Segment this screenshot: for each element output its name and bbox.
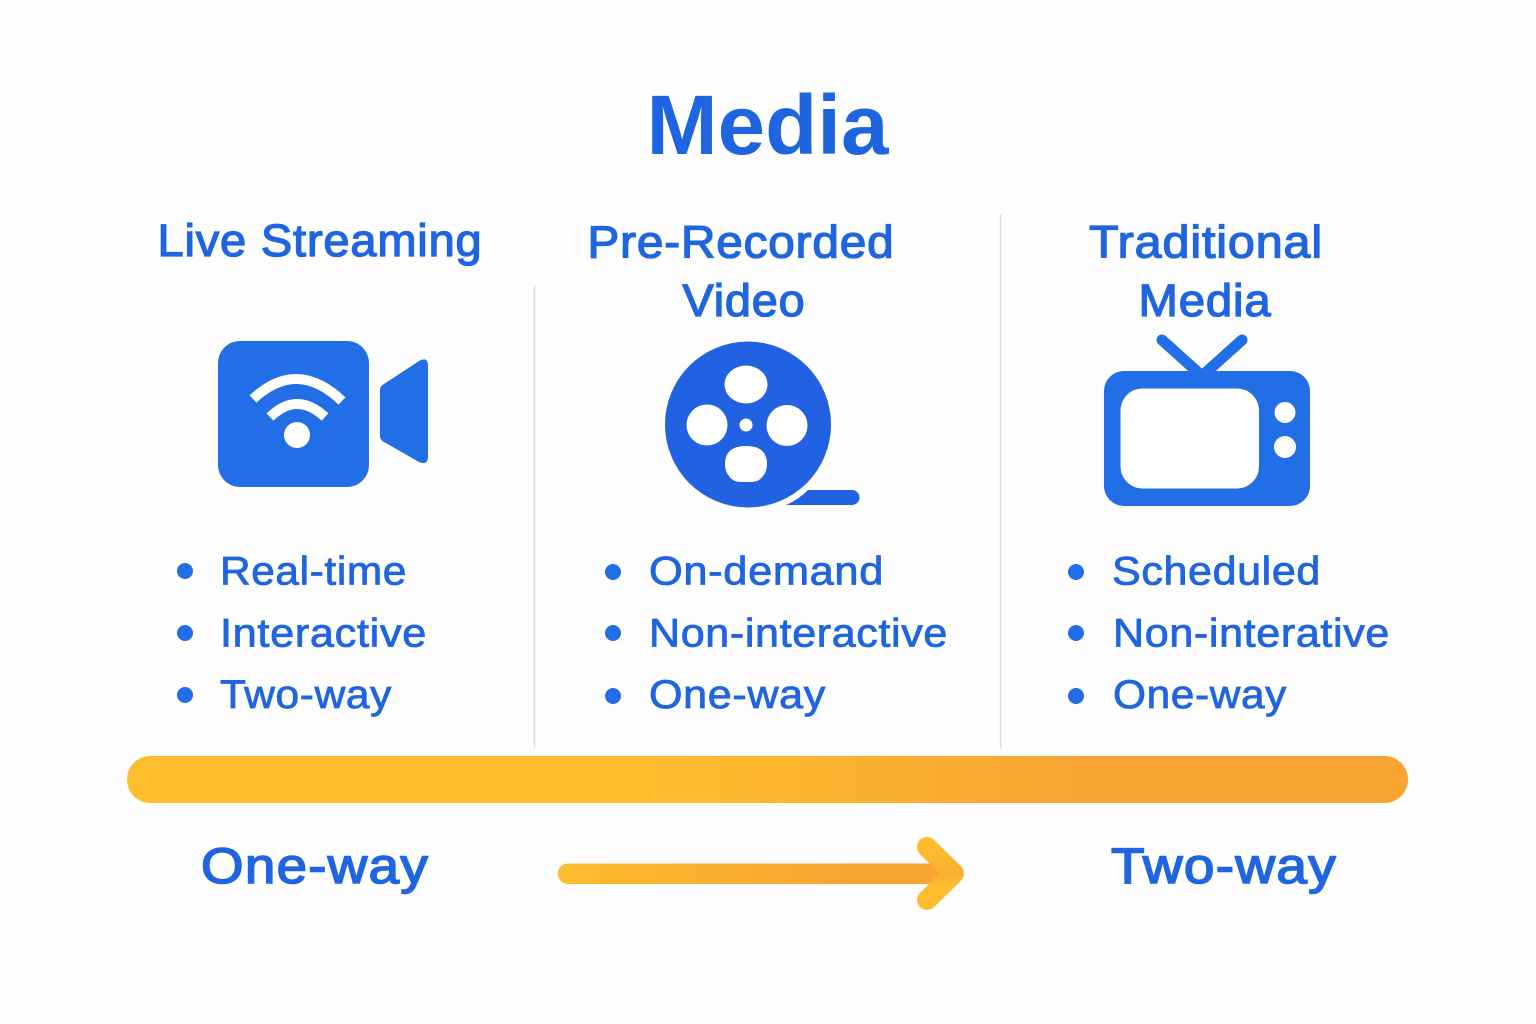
list: traditional traits: Non-interative [1113,612,1390,656]
spectrum bar [127,756,1408,803]
list: pre-recorded traits: Non-interactive [649,612,948,656]
list: live streaming traits: Interactive [220,612,427,656]
list: live streaming traits: Real-time [220,550,407,594]
list: live streaming traits [177,550,427,717]
heading: pre-recorded video: Pre-Recorded [588,216,894,268]
list: pre-recorded traits: On-demand [649,550,884,594]
label: one-way: One-way [201,838,429,894]
icon: video camera with wifi [218,341,428,487]
list: traditional traits [1068,550,1390,717]
column divider right [1000,214,1002,748]
heading: live streaming: Live Streaming [158,215,482,266]
arrow [558,847,954,900]
heading: traditional media: Traditional [1089,216,1323,268]
icon: television [1104,340,1310,506]
list: live streaming traits: Two-way [220,673,392,717]
list: pre-recorded traits [605,550,948,717]
heading: traditional media: Media [1138,275,1272,326]
list: traditional traits: One-way [1113,673,1287,717]
list: traditional traits: Scheduled [1112,550,1321,594]
panel: traditional media [1068,216,1390,717]
list: pre-recorded traits: One-way [649,673,826,717]
panel: pre-recorded video [588,216,948,717]
panel: live streaming [158,215,482,717]
title: Media [646,78,890,172]
column divider left [534,285,536,748]
heading: pre-recorded video: Video [682,275,806,326]
icon: film reel [665,342,860,508]
label: two-way: Two-way [1111,838,1337,894]
